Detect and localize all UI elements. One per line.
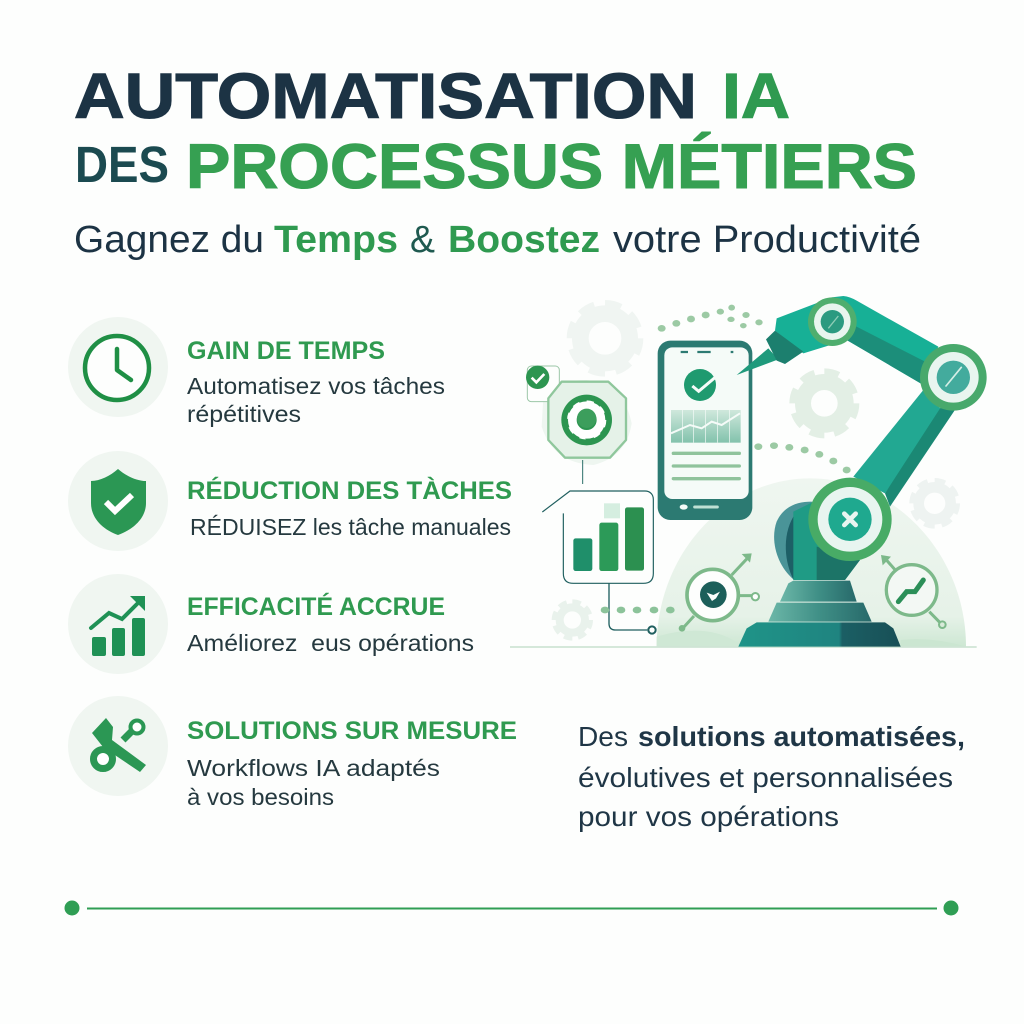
closing statement xyxy=(578,721,965,832)
shoulder xyxy=(774,502,860,580)
subtitle: Boostez xyxy=(448,219,600,261)
heading: RÉDUCTION DES TÀCHES xyxy=(187,476,512,505)
subtitle: & xyxy=(410,219,435,261)
icon: clock xyxy=(68,317,168,417)
upper arm xyxy=(775,296,938,384)
heading: GAIN DE TEMPS xyxy=(187,337,385,365)
bottom divider xyxy=(64,900,958,916)
title: PROCESSUS MÉTIERS xyxy=(186,132,917,202)
elbow joint xyxy=(920,344,987,411)
text block: Automatisez vos tâches xyxy=(187,373,445,399)
subtitle: Temps xyxy=(274,219,398,261)
gear: centre xyxy=(793,372,855,434)
ground line xyxy=(510,644,977,649)
gear: bottom left xyxy=(554,602,590,638)
lower arm xyxy=(853,390,957,507)
dotted path: bottom xyxy=(601,607,675,613)
title: DES xyxy=(75,136,169,193)
gear: right xyxy=(912,481,957,526)
heading: SOLUTIONS SUR MESURE xyxy=(187,717,517,745)
text block: Workflows IA adaptés xyxy=(187,755,440,781)
text block: à vos besoins xyxy=(187,784,334,810)
dotted path: right xyxy=(754,442,851,473)
bar chart card xyxy=(542,491,653,583)
title xyxy=(74,60,917,202)
title: AUTOMATISATION xyxy=(74,60,697,132)
dotted path: top xyxy=(658,305,763,332)
subtitle: Gagnez du xyxy=(74,219,264,261)
feature: réduction des tâches xyxy=(68,451,512,551)
ground accent left xyxy=(657,631,743,647)
icon: tools xyxy=(68,696,168,796)
illustration: robot arm and automation xyxy=(510,296,987,647)
text block: RÉDUISEZ les tâche manuales xyxy=(190,514,511,540)
robot arm xyxy=(737,296,987,647)
closing statement: évolutives et personnalisées xyxy=(578,762,953,793)
node: right circuit xyxy=(881,555,946,628)
text block: Améliorez eus opérations xyxy=(187,630,474,656)
feature: efficacité accrue xyxy=(68,574,474,674)
robot base xyxy=(738,581,901,647)
node: left circuit xyxy=(679,553,759,632)
feature: gain de temps xyxy=(68,317,445,427)
ground accent right xyxy=(901,639,966,647)
gear: top left xyxy=(571,304,639,373)
feature: solutions sur mesure xyxy=(68,696,517,810)
subtitle xyxy=(74,219,921,261)
icon: shield xyxy=(68,451,168,551)
connector: badge to chart xyxy=(581,460,584,484)
heading: EFFICACITÉ ACCRUE xyxy=(187,592,445,621)
title: IA xyxy=(722,60,790,132)
connector: chart to node xyxy=(609,583,656,634)
text block: répétitives xyxy=(187,401,301,427)
wrist joint xyxy=(808,297,857,346)
base joint xyxy=(808,478,892,561)
subtitle: votre Productivité xyxy=(613,219,921,261)
closing statement: solutions automatisées, xyxy=(638,721,965,752)
gear badge with check card xyxy=(526,366,632,465)
closing statement: pour vos opérations xyxy=(578,801,839,832)
icon: growth chart xyxy=(68,574,168,674)
closing statement: Des xyxy=(578,721,628,752)
phone xyxy=(658,341,752,520)
background hill xyxy=(657,478,966,647)
tool head xyxy=(737,331,803,375)
